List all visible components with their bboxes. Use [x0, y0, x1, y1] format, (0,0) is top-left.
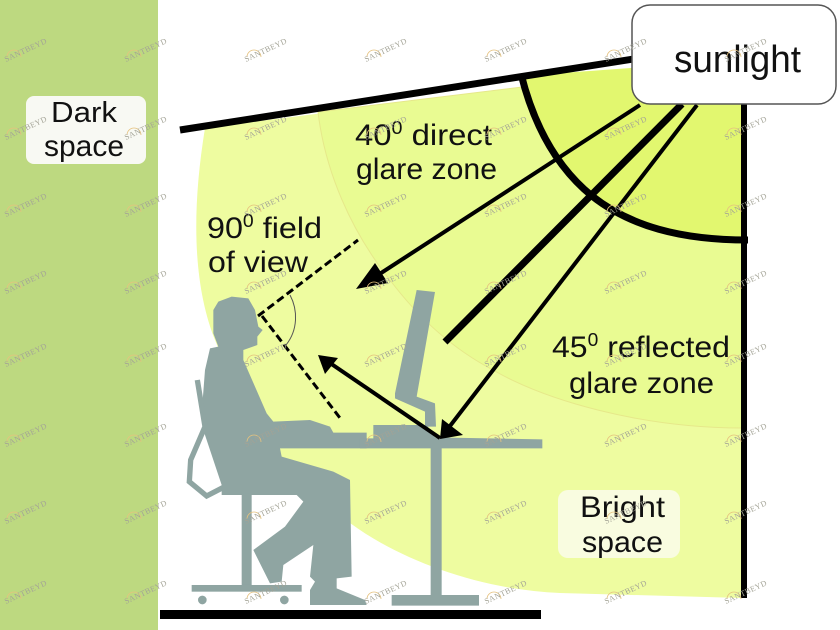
ray: direct sun glare arrow: [356, 105, 640, 289]
label: 90 degree field of view: of view: [208, 246, 308, 279]
label: 45 degree reflected glare zone: 45: [552, 331, 585, 364]
watermark grid: SANTBEYD: [723, 421, 768, 449]
monitor: [395, 290, 436, 427]
watermark grid: SANTBEYD: [123, 421, 168, 449]
watermark grid: SANTBEYD: [243, 341, 288, 369]
watermark grid: SANTBEYD: [363, 421, 408, 449]
watermark grid: SANTBEYD: [603, 341, 648, 369]
zone: 45 degree reflected glare zone: [318, 60, 742, 428]
label box: dark space: space: [44, 130, 124, 163]
label box: sunlight: [632, 5, 836, 104]
watermark grid: SANTBEYD: [723, 498, 768, 526]
watermark grid: SANTBEYD: [723, 268, 768, 296]
label: 45 degree reflected glare zone: [552, 330, 730, 400]
watermark grid: SANTBEYD: [483, 498, 528, 526]
watermark grid: SANTBEYD: [243, 191, 288, 219]
ray: sun ray reflected on desk: [440, 105, 697, 439]
watermark grid: SANTBEYD: [363, 191, 408, 219]
watermark grid: SANTBEYD: [243, 36, 288, 64]
watermark grid: SANTBEYD: [123, 191, 168, 219]
label: 90 degree field of view: 90: [207, 212, 240, 245]
watermark grid: SANTBEYD: [363, 341, 408, 369]
watermark grid: SANTBEYD: [723, 578, 768, 606]
watermark grid: SANTBEYD: [3, 268, 48, 296]
watermark grid: SANTBEYD: [363, 36, 408, 64]
watermark grid: SANTBEYD: [3, 578, 48, 606]
watermark grid: SANTBEYD: [603, 268, 648, 296]
label box: bright space: space: [582, 526, 663, 559]
watermark grid: SANTBEYD: [483, 268, 528, 296]
label: 45 degree reflected glare zone: reflected: [598, 331, 730, 364]
watermark grid: SANTBEYD: [3, 191, 48, 219]
label: 40 degree direct glare zone: glare zone: [356, 153, 497, 186]
watermark grid: SANTBEYD: [363, 114, 408, 142]
label: 45 degree reflected glare zone: glare zone: [569, 367, 714, 400]
watermark grid: SANTBEYD: [603, 114, 648, 142]
watermark grid: SANTBEYD: [723, 36, 768, 64]
watermark grid: SANTBEYD: [3, 36, 48, 64]
zone: 40 degree direct glare zone: [520, 60, 742, 240]
label box: dark space: Dark: [51, 97, 118, 129]
watermark grid: SANTBEYD: [123, 36, 168, 64]
label: 90 degree field of view: field: [254, 212, 322, 245]
floor line: [160, 610, 541, 619]
watermark grid: SANTBEYD: [3, 114, 48, 142]
watermark grid: SANTBEYD: [3, 341, 48, 369]
label box: dark space: [26, 96, 146, 164]
watermark grid: SANTBEYD: [363, 578, 408, 606]
watermark grid: SANTBEYD: [483, 341, 528, 369]
watermark grid: SANTBEYD: [123, 578, 168, 606]
watermark grid: SANTBEYD: [3, 421, 48, 449]
watermark grid: SANTBEYD: [243, 498, 288, 526]
label: 90 degree field of view: 0: [243, 211, 254, 231]
thick arc: direct glare zone boundary: [521, 74, 748, 240]
watermark grid: SANTBEYD: [123, 114, 168, 142]
watermark grid: SANTBEYD: [123, 498, 168, 526]
watermark grid: SANTBEYD: [243, 114, 288, 142]
desk and keyboard: [360, 425, 542, 606]
chair: [189, 380, 302, 604]
label box: bright space: Bright: [580, 491, 666, 524]
watermark grid: SANTBEYD: [483, 578, 528, 606]
watermark grid: SANTBEYD: [723, 191, 768, 219]
arrow: reflected glare toward viewer: [318, 355, 440, 438]
watermark grid: SANTBEYD: [603, 36, 648, 64]
zone: bright space outer field: [196, 60, 742, 598]
watermark grid: SANTBEYD: [243, 578, 288, 606]
watermark grid: SANTBEYD: [483, 421, 528, 449]
watermark grid: SANTBEYD: [243, 268, 288, 296]
watermark grid: SANTBEYD: [603, 191, 648, 219]
roof line: [180, 58, 640, 130]
wall line: [741, 100, 747, 598]
person: [202, 297, 367, 605]
watermark grid: SANTBEYD: [723, 114, 768, 142]
watermark grid: SANTBEYD: [123, 268, 168, 296]
label: 40 degree direct glare zone: 40: [355, 119, 388, 152]
label box: bright space: [558, 490, 680, 559]
watermark grid: SANTBEYD: [243, 421, 288, 449]
panel: dark space strip: [0, 0, 158, 630]
watermark grid: SANTBEYD: [3, 498, 48, 526]
watermark grid: SANTBEYD: [603, 578, 648, 606]
label: 40 degree direct glare zone: [355, 118, 497, 186]
label box: sunlight: sunlight: [674, 39, 801, 81]
watermark grid: SANTBEYD: [723, 341, 768, 369]
ray: thick sun ray to monitor: [445, 104, 682, 342]
watermark grid: SANTBEYD: [483, 36, 528, 64]
label: 40 degree direct glare zone: direct: [403, 119, 493, 152]
watermark grid: SANTBEYD: [603, 498, 648, 526]
workstation and person silhouette: [189, 290, 542, 606]
label: 40 degree direct glare zone: 0: [392, 118, 403, 138]
label: 45 degree reflected glare zone: 0: [588, 330, 598, 350]
watermark grid: SANTBEYD: [123, 341, 168, 369]
field of view dashed lines and angle arc: [258, 240, 358, 418]
watermark grid: SANTBEYD: [483, 191, 528, 219]
watermark grid: SANTBEYD: [363, 498, 408, 526]
watermark grid: SANTBEYD: [603, 421, 648, 449]
watermark grid: SANTBEYD: [363, 268, 408, 296]
label: 90 degree field of view: [207, 211, 322, 279]
watermark grid: SANTBEYD: [483, 114, 528, 142]
